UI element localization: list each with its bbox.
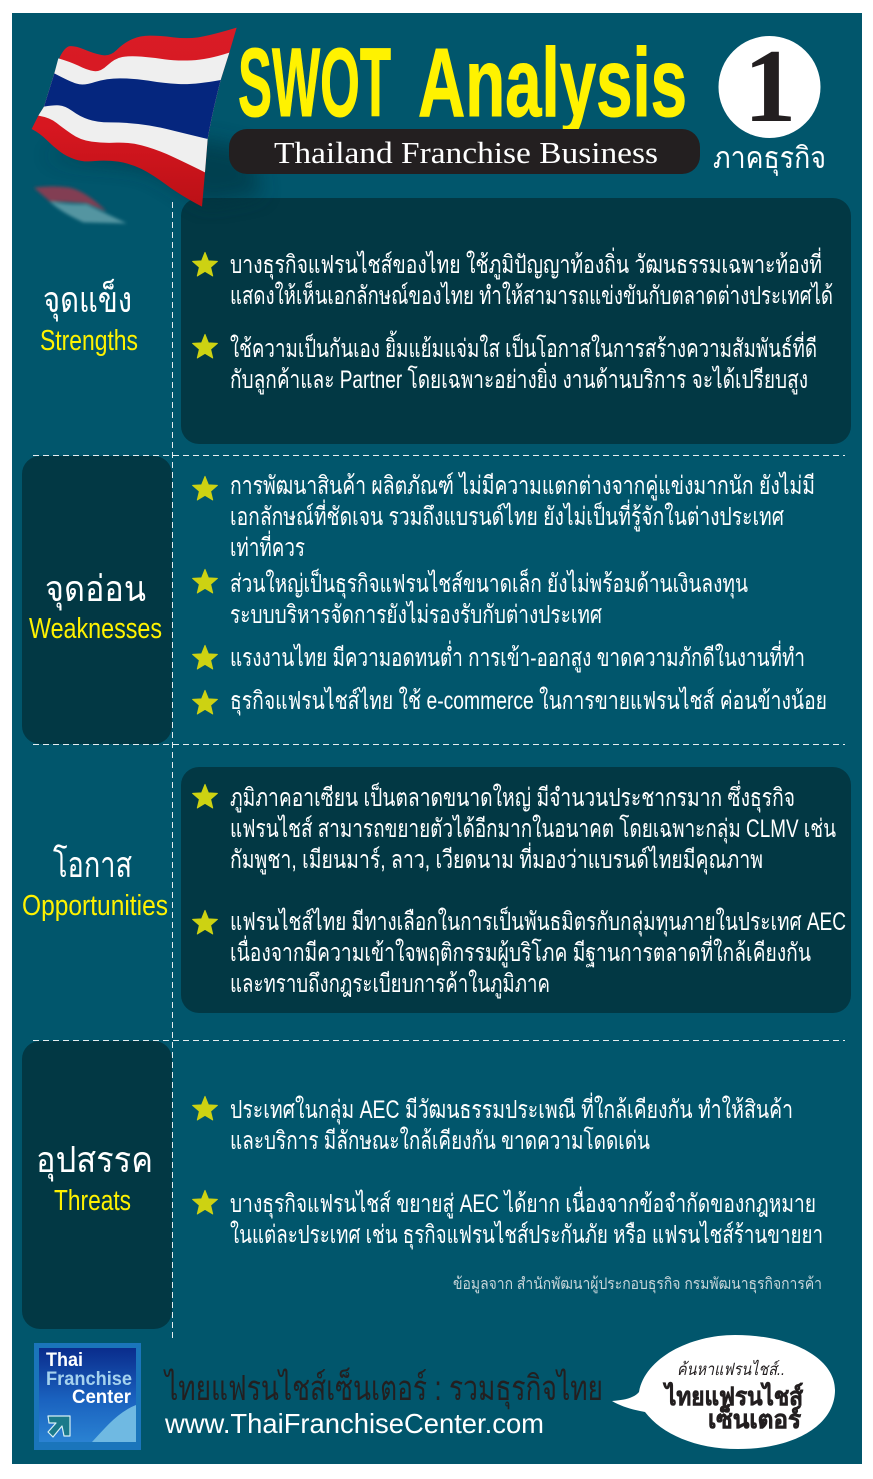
weaknesses items: ระบบบริหารจัดการยังไม่รองรับกับต่างประเทศ <box>230 600 602 629</box>
number badge <box>718 27 820 144</box>
section label: threats: Threats <box>54 1185 131 1217</box>
footer Thai tagline: ไทยแฟรนไชส์เซ็นเตอร์ : รวมธุรกิจไทย <box>163 1367 603 1409</box>
section label: opportunities <box>22 844 168 922</box>
section label: strengths: Strengths <box>40 325 138 357</box>
section label: threats <box>36 1139 153 1217</box>
opportunities items <box>193 780 846 999</box>
logo: Thai Franchise Center: Thai <box>46 1350 83 1371</box>
panel: weaknesses label <box>22 456 172 744</box>
threats items <box>193 1092 823 1250</box>
strengths items <box>193 247 833 395</box>
flag reflection <box>34 186 127 223</box>
title: Analysis <box>418 28 687 137</box>
section label: strengths <box>40 277 138 357</box>
panel: opportunities content <box>181 767 851 1013</box>
section label: weaknesses: Weaknesses <box>29 613 162 645</box>
flag shadow <box>45 140 262 205</box>
icon: Thai flag <box>32 28 237 207</box>
opportunities items: และทราบถึงกฎระเบียบการค้าในภูมิภาค <box>230 969 550 999</box>
footer URL: www.ThaiFranchiseCenter.com <box>164 1408 544 1439</box>
section label: strengths: จุดแข็ง <box>43 277 132 322</box>
title <box>238 28 687 137</box>
logo: Thai Franchise Center <box>34 1343 141 1450</box>
logo: Thai Franchise Center: Center <box>72 1387 132 1408</box>
subtitle pill <box>229 129 700 174</box>
section label: weaknesses: จุดอ่อน <box>45 568 146 611</box>
number badge: 1 <box>744 27 796 144</box>
speech bubble: ค้นหาแฟรนไชส์.. <box>677 1359 785 1379</box>
title: SWOT <box>238 28 391 137</box>
subtitle pill: Thailand Franchise Business <box>274 135 658 170</box>
weaknesses items <box>193 471 827 716</box>
speech bubble: เซ็นเตอร์ <box>708 1404 802 1434</box>
section label: opportunities: โอกาส <box>53 844 132 885</box>
source note: ข้อมูลจาก สำนักพัฒนาผู้ประกอบธุรกิจ กรมพัฒนาธุรกิจการค้า <box>453 1275 822 1294</box>
panel: threats label <box>22 1041 172 1329</box>
speech bubble <box>612 1335 835 1449</box>
section label: weaknesses <box>29 568 162 645</box>
logo: Thai Franchise Center: Franchise <box>46 1369 132 1390</box>
threats items: และบริการ มีลักษณะใกล้เคียงกัน ขาดความโดดเด่น <box>230 1126 650 1155</box>
sector label: ภาคธุรกิจ <box>713 142 826 177</box>
section label: threats: อุปสรรค <box>36 1139 153 1182</box>
weaknesses items: เท่าที่ควร <box>230 530 305 562</box>
panel: strengths content <box>181 198 851 444</box>
section label: opportunities: Opportunities <box>22 890 168 922</box>
speech bubble: ไทยแฟรนไชส์ <box>662 1381 804 1411</box>
